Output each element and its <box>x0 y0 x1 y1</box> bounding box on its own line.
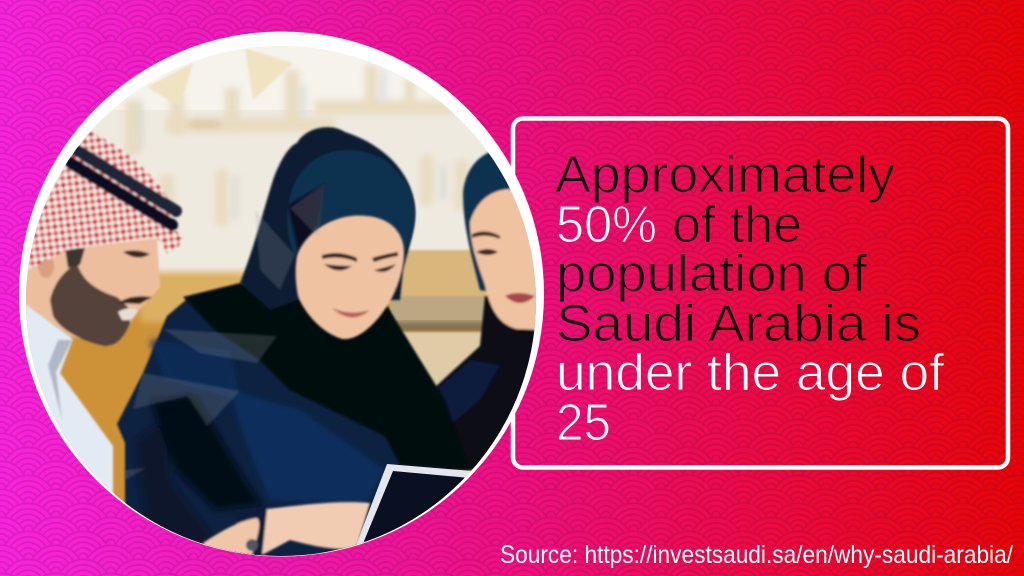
arm and hand <box>203 502 370 556</box>
photo: three young Saudis looking at a tablet <box>10 40 560 560</box>
beard <box>50 263 130 346</box>
watermark triangles on wall <box>147 48 293 102</box>
center woman <box>117 127 480 560</box>
body <box>117 299 480 560</box>
face <box>296 215 404 339</box>
scarf <box>183 283 470 470</box>
line: Saudi Arabia is: Saudi Arabia is <box>556 295 921 353</box>
black agal bands <box>78 151 176 211</box>
line: under the age of: under the age of <box>556 344 945 402</box>
text panel frame <box>513 118 1008 468</box>
white circle behind photo <box>19 32 544 556</box>
line: 25: 25 <box>556 394 611 452</box>
tablet <box>356 464 471 544</box>
line: Approximately: Approximately <box>555 146 895 204</box>
red checkered headdress <box>28 130 183 270</box>
hijab <box>240 127 415 310</box>
man <box>26 130 184 494</box>
watermark swooshes <box>125 183 325 480</box>
face and neck <box>20 238 160 346</box>
ear <box>38 254 54 278</box>
statement text <box>555 146 945 452</box>
right woman <box>435 152 536 471</box>
photo background: blurred building and signage <box>20 40 540 558</box>
line: population of: population of <box>556 245 868 303</box>
thobe <box>26 302 115 494</box>
line: of the: of the <box>672 196 802 254</box>
highlighted figure: 50% <box>556 196 657 254</box>
